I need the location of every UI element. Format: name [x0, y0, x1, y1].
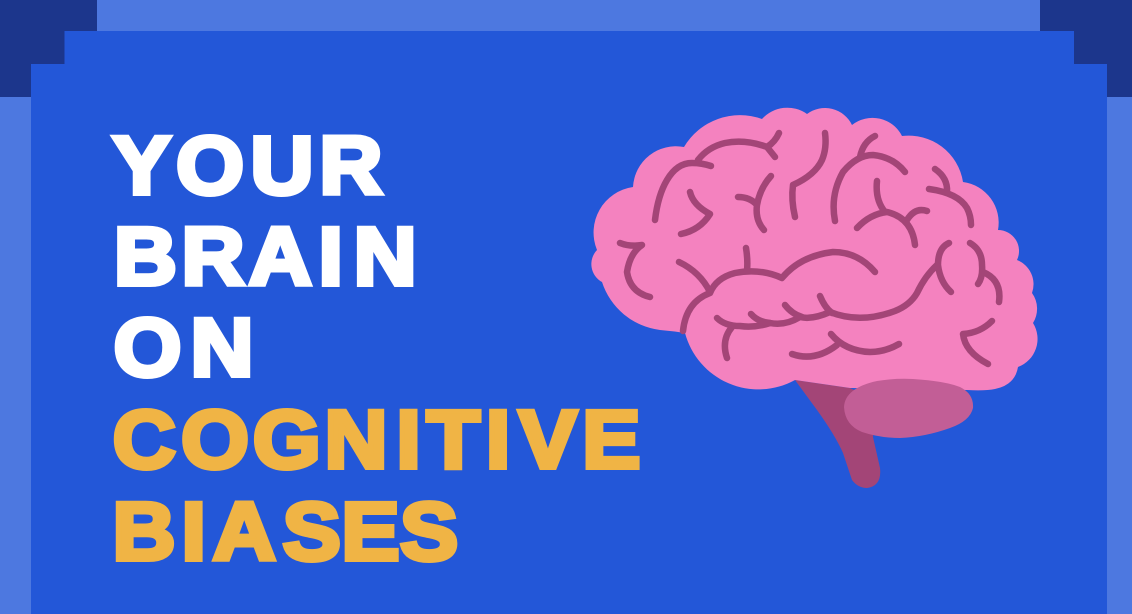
brain folds: [620, 133, 999, 364]
cerebellum: [844, 379, 973, 438]
title: [113, 120, 640, 577]
title line: BIASES: BIASES: [113, 486, 458, 577]
cerebrum outline: [591, 108, 1038, 390]
title line: YOUR: YOUR: [113, 120, 382, 211]
title line: COGNITIVE: COGNITIVE: [113, 394, 640, 485]
brain stem: [795, 380, 880, 488]
title line: ON: ON: [114, 302, 253, 393]
title line: BRAIN: BRAIN: [114, 211, 416, 302]
icon: brain: [591, 108, 1038, 488]
